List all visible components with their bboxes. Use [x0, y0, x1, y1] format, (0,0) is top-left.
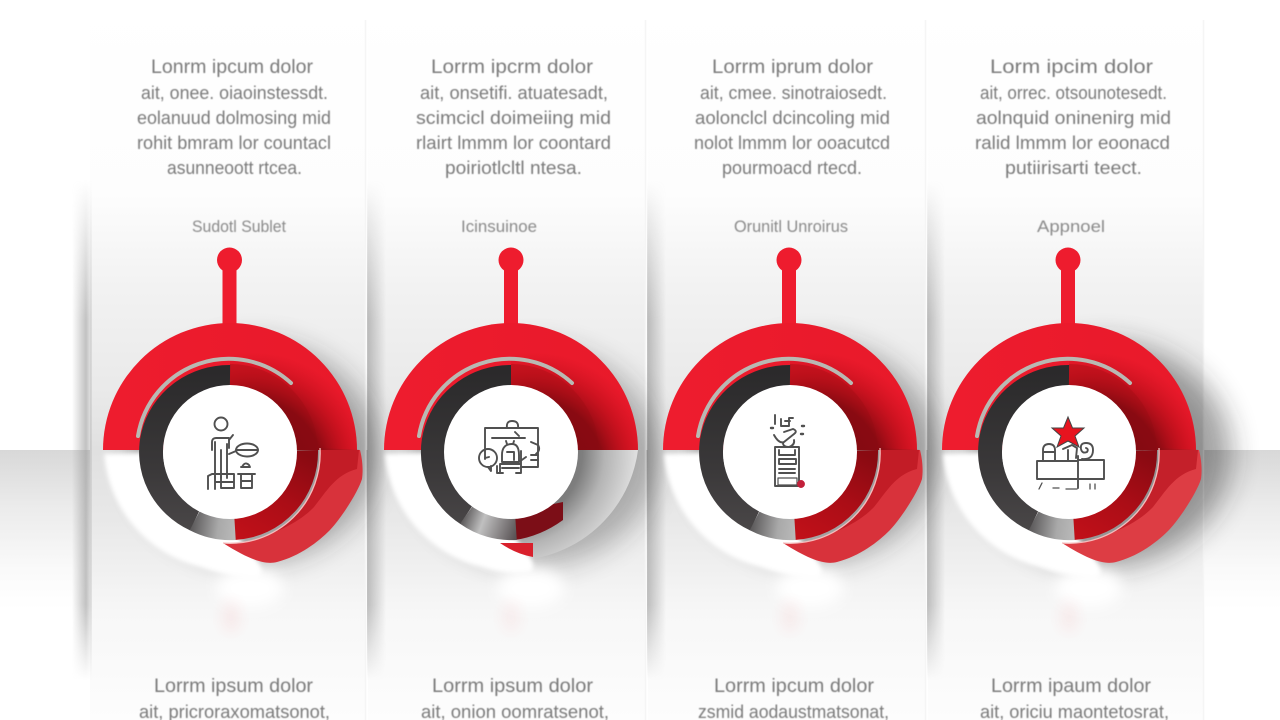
red pin [776, 248, 802, 332]
label: column 1: Sudotl Sublet [192, 217, 286, 236]
inner ring and shading [977, 325, 1196, 543]
text block: column 3 top: pourmoacd rtecd. [722, 158, 862, 178]
red upper arc [384, 323, 638, 450]
white lower crescent [104, 452, 261, 578]
text block: column 2 bottom [421, 676, 609, 720]
text block: column 2 top: rlairt lmmm lor coontard [416, 133, 611, 153]
white lower crescent [664, 452, 821, 578]
white centre [163, 385, 297, 519]
red upper arc [942, 323, 1196, 450]
floor band [0, 450, 1280, 610]
text block: column 1 top: eolanuud dolmosing mid [137, 108, 331, 128]
text block: column 4 top: ait, orrec. otsounotesedt. [980, 83, 1167, 103]
text block: column 4 top [975, 57, 1171, 178]
text block: column 1 top: rohit bmram lor countacl [137, 133, 331, 153]
red lower blob [1062, 448, 1202, 563]
icon: person with leaf and boxes [208, 418, 258, 489]
text block: column 4 top: ralid lmmm lor eoonacd [975, 133, 1170, 153]
red pin [1056, 248, 1080, 332]
text block: column 4 bottom: Lorrm ipaum dolor [991, 676, 1152, 697]
text block: column 2 bottom: Lorrm ipsum dolor [432, 676, 594, 697]
inner ring and shading [698, 325, 917, 543]
icon: machine with red dot [771, 415, 804, 487]
label: column 3: Orunitl Unroirus [734, 217, 848, 236]
text block: column 1 top [137, 57, 331, 178]
text block: column 3 top: nolot lmmm lor ooacutcd [694, 133, 890, 153]
text block: column 2 top: scimcicl doimeiing mid [416, 108, 611, 128]
text block: column 3 bottom: Lorrm ipcum dolor [714, 676, 875, 697]
panel: background column 1 [90, 0, 365, 720]
red wedge [500, 543, 533, 557]
label: column 4: Appnoel [1037, 217, 1105, 236]
text block: column 3 top: aolonclcl dcincoling mid [695, 108, 890, 128]
gray lower right sector [501, 450, 638, 560]
text block: column 4 top: aolnquid oninenirg mid [976, 108, 1171, 128]
red lower blob [223, 448, 363, 563]
red lower blob [783, 448, 923, 563]
red pin [498, 248, 524, 332]
label: column 2: Icinsuinoe [461, 217, 537, 236]
text block: column 2 top: ait, onsetifi. atuatesadt, [420, 83, 608, 103]
text block: column 2 top [416, 57, 611, 178]
text block: column 1 bottom [139, 676, 330, 720]
text block: column 4 bottom [980, 676, 1169, 720]
step 3 graphic [663, 248, 936, 633]
panel: background column 3 [648, 0, 925, 720]
text block: column 2 top: poiriotlcltl ntesa. [445, 158, 582, 178]
text block: column 3 bottom [698, 676, 889, 720]
text block: column 2 top: Lorrm ipcrm dolor [431, 57, 594, 78]
step 4 graphic [942, 248, 1231, 633]
text block: column 3 top: ait, cmee. sinotraiosedt. [700, 83, 887, 103]
red upper arc [663, 323, 917, 450]
text block: column 3 top: Lorrm iprum dolor [712, 57, 874, 78]
text block: column 3 top [694, 57, 890, 178]
red pin [217, 248, 242, 332]
step 1 graphic [103, 248, 376, 633]
panel: background column 2 [368, 0, 645, 720]
text block: column 4 top: putiirisarti teect. [1005, 158, 1142, 178]
step 2 graphic [384, 248, 657, 633]
text block: column 1 top: Lonrm ipcum dolor [151, 57, 314, 78]
icon: approval star and desk [1037, 417, 1104, 489]
panel: background column 4 [928, 0, 1203, 720]
white lower crescent [943, 452, 1100, 578]
text block: column 4 top: Lorm ipcim dolor [990, 57, 1154, 78]
icon: presenter at board [479, 421, 539, 473]
white centre [444, 385, 578, 519]
text block: column 1 top: ait, onee. oiaoinstessdt. [141, 83, 328, 103]
text block: column 1 bottom: Lorrm ipsum dolor [154, 676, 314, 697]
white centre [1002, 385, 1136, 519]
inner ring and shading [138, 325, 357, 543]
white centre [723, 385, 857, 519]
white lower crescent [385, 452, 533, 573]
red upper arc [103, 323, 357, 450]
text block: column 1 top: asunneoott rtcea. [167, 158, 302, 178]
inner ring and shading [419, 325, 638, 540]
